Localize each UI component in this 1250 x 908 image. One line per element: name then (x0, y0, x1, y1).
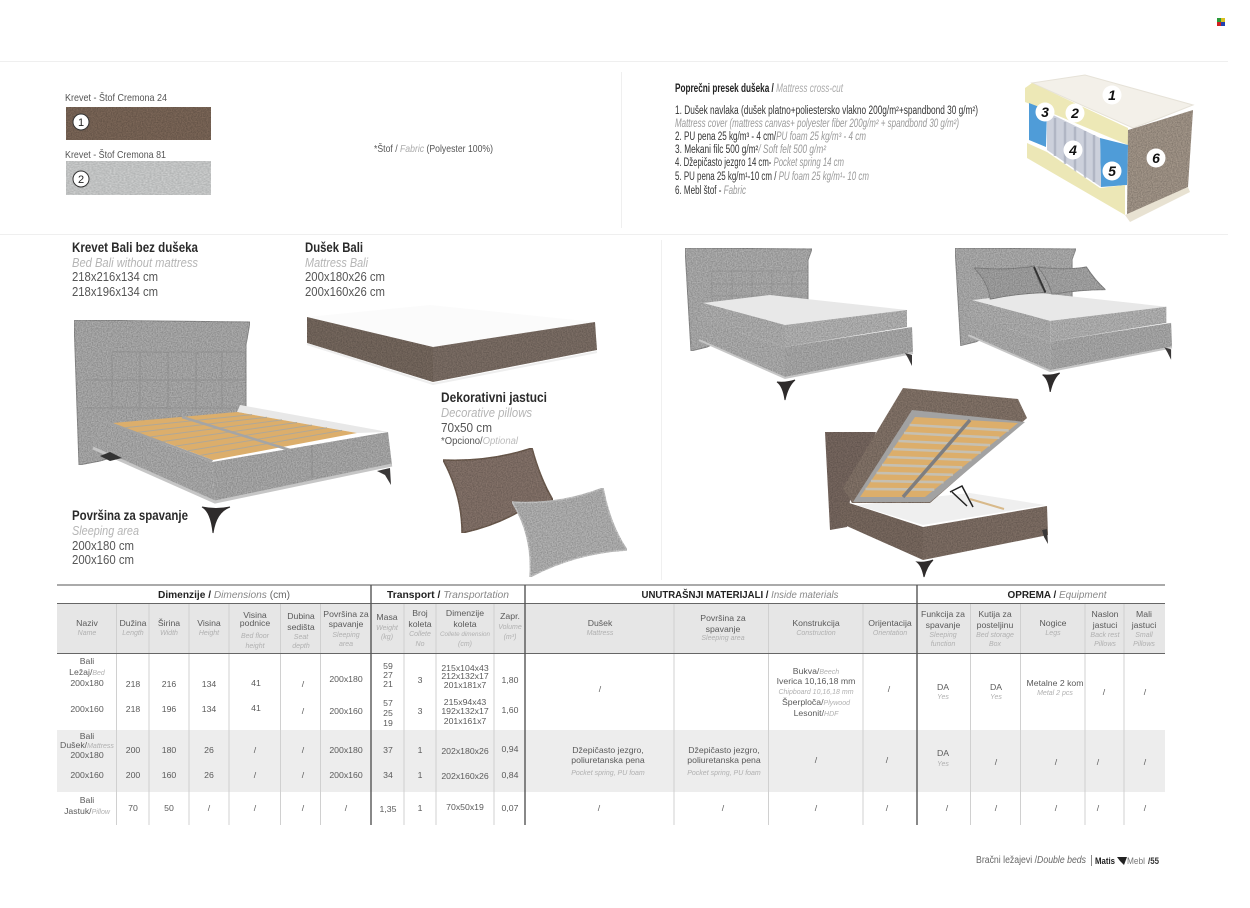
table column headers: sedišta (287, 622, 315, 632)
table row: bed 200x180 and 200x160: 41 (251, 678, 261, 688)
table column headers: Dubina (287, 611, 315, 621)
table column headers: posteljinu (977, 620, 1014, 630)
table row: pillow: / (946, 803, 949, 813)
footer: /55 (1148, 856, 1160, 867)
table row: bed 200x180 and 200x160: 1,80 (502, 675, 519, 685)
table column headers: Funkcija za (921, 609, 965, 619)
table row: bed 200x180 and 200x160: 3 (418, 675, 423, 685)
table column headers: Konstrukcija (792, 618, 840, 628)
table row: bed 200x180 and 200x160: 192x132x17 (441, 706, 489, 716)
table row: pillow: 0,07 (502, 803, 519, 813)
table row: bed 200x180 and 200x160: DA (990, 682, 1002, 692)
table column headers: Volume (498, 624, 522, 631)
table row: bed 200x180 and 200x160: 218 (126, 679, 140, 689)
table row: bed 200x180 and 200x160: 215x104x43 (441, 663, 489, 673)
table group headings (158, 588, 1108, 601)
footer: Bračni ležajevi /Double beds (976, 855, 1086, 866)
table row: bed 200x180 and 200x160: / (888, 684, 891, 694)
table row: mattress 200x180 and 200x160: Dušek/Mattress (60, 740, 114, 750)
callout numbers: 1 (1108, 87, 1116, 103)
table row: pillow (64, 795, 1147, 816)
text block: bed sizes: Krevet Bali bez dušeka (72, 240, 198, 255)
table column headers: Dimenzije (446, 608, 484, 618)
table row: bed 200x180 and 200x160: Metalne 2 kom (1027, 678, 1083, 688)
panel: mattress cross-cut text (675, 83, 978, 197)
table row: bed 200x180 and 200x160: / (1103, 687, 1106, 697)
text block: bed sizes: 218x196x134 cm (72, 284, 158, 299)
text block: sleeping area: Površina za spavanje (72, 508, 188, 523)
footer: Mebl (1127, 856, 1145, 867)
table column headers: Površina za (323, 609, 369, 619)
table group headings: OPREMA / Equipment (1008, 589, 1108, 601)
table row: pillow: / (995, 803, 998, 813)
text block: mattress sizes (305, 240, 385, 299)
table row: mattress 200x180 and 200x160: Džepičasto jezgro, (688, 745, 760, 755)
layer list (675, 105, 978, 197)
table row: mattress 200x180 and 200x160 (60, 731, 1147, 781)
table row: bed 200x180 and 200x160: 200x160 (329, 706, 363, 716)
text block: mattress sizes: Mattress Bali (305, 255, 369, 270)
table row: bed 200x180 and 200x160: Šperploča/Plywood (782, 697, 851, 707)
table column headers: Naslon (1091, 609, 1119, 619)
table column headers: Broj (412, 608, 428, 618)
text block: mattress sizes: Dušek Bali (305, 240, 363, 255)
table column headers: Sleeping area (701, 635, 745, 642)
cross-cut heading: Poprečni presek dušeka / Mattress cross-cut (675, 83, 844, 95)
table column headers: Weight (376, 625, 399, 632)
text block: sleeping area (72, 508, 188, 567)
table row: bed 200x180 and 200x160: 21 (383, 679, 393, 689)
table column headers: Height (199, 630, 220, 637)
table group headings: UNUTRAŠNJI MATERIJALI / Inside materials (642, 588, 839, 601)
table row: bed 200x180 and 200x160: 19 (383, 718, 393, 728)
table row: bed 200x180 and 200x160: 215x94x43 (444, 697, 486, 707)
table row: mattress 200x180 and 200x160: / (995, 757, 998, 767)
table row: bed 200x180 and 200x160: Iverica 10,16,18 mm (777, 676, 855, 686)
table row: bed 200x180 and 200x160: 57 (383, 698, 393, 708)
swatch 2: 2 (78, 174, 84, 186)
table group headings: Transport / Transportation (387, 589, 509, 601)
table row: mattress 200x180 and 200x160: 202x160x26 (441, 771, 489, 781)
table column headers: Kutija za (978, 609, 1012, 619)
table column headers: spavanje (706, 624, 741, 634)
table row: bed 200x180 and 200x160: 212x132x17 (441, 671, 489, 681)
table row: mattress 200x180 and 200x160: / (254, 745, 257, 755)
table row: pillow: / (254, 803, 257, 813)
table row: bed 200x180 and 200x160: DA (937, 682, 949, 692)
table column headers: Construction (796, 630, 836, 637)
table row: pillow: / (302, 803, 305, 813)
table column headers: jastuci (1131, 620, 1156, 630)
table row: bed 200x180 and 200x160: 59 (383, 661, 393, 671)
image: bed without mattress (74, 320, 392, 533)
table row: mattress 200x180 and 200x160: / (886, 755, 889, 765)
table row: pillow: / (1055, 803, 1058, 813)
footer: Matis (1095, 856, 1115, 867)
image: bed with mattress and pillows (955, 248, 1172, 392)
table column headers: Masa (376, 612, 398, 622)
image: bed with open storage (825, 388, 1048, 577)
layer list: 1. Dušek navlaka (dušek platno+poliestersko vlakno 200g/m²+spandbond 30 g/m²) (675, 105, 978, 117)
table row: bed 200x180 and 200x160: 196 (162, 704, 176, 714)
table row: mattress 200x180 and 200x160: 1 (418, 745, 423, 755)
layer list: 5. PU pena 25 kg/m¹-10 cm / PU foam 25 kg/m¹- 10 cm (675, 171, 869, 183)
table row: mattress 200x180 and 200x160: / (1144, 757, 1147, 767)
table column headers: Orijentacija (868, 618, 912, 628)
table row: pillow: / (886, 803, 889, 813)
table column headers: Orientation (873, 630, 907, 637)
table row: bed 200x180 and 200x160: / (302, 679, 305, 689)
table row: bed 200x180 and 200x160: Bukva/Beech (793, 666, 839, 676)
table column headers: function (931, 641, 955, 648)
table column headers: Small (1135, 632, 1153, 639)
icon: logo mark (1117, 857, 1127, 865)
table row: bed 200x180 and 200x160: 200x180 (329, 674, 363, 684)
text block: sleeping area: Sleeping area (72, 523, 139, 538)
image: pillows (443, 448, 627, 577)
table row: pillow: 70 (128, 803, 138, 813)
table row: pillow: / (1144, 803, 1147, 813)
table row: mattress 200x180 and 200x160: 26 (204, 745, 214, 755)
callout numbers: 6 (1152, 150, 1160, 166)
table column headers: Dušek (588, 618, 613, 628)
table row: mattress 200x180 and 200x160: 200 (126, 770, 140, 780)
table row: bed 200x180 and 200x160: 1,60 (502, 705, 519, 715)
table column headers: koleta (453, 619, 477, 629)
table column headers: jastuci (1092, 620, 1117, 630)
table column headers: spavanje (926, 620, 961, 630)
text block: sleeping area: 200x160 cm (72, 552, 134, 567)
table row: mattress 200x180 and 200x160: Bali (80, 731, 94, 741)
table group headings: Dimenzije / Dimensions (cm) (158, 589, 290, 601)
table column headers: Mattress (587, 630, 614, 637)
text block: decorative pillows (441, 390, 547, 447)
table column headers (76, 608, 1156, 650)
table row: mattress 200x180 and 200x160: poliuretanska pena (571, 755, 645, 765)
table column headers: Sleeping (929, 632, 957, 639)
table row: mattress 200x180 and 200x160: poliuretanska pena (687, 755, 761, 765)
table row: bed 200x180 and 200x160: / (1144, 687, 1147, 697)
image: bed with mattress (685, 248, 913, 400)
table row: mattress 200x180 and 200x160: 0,94 (502, 744, 519, 754)
text block: sleeping area: 200x180 cm (72, 538, 134, 553)
text block: decorative pillows: *Opciono/Optional (441, 436, 519, 447)
table row: mattress 200x180 and 200x160: 37 (383, 745, 393, 755)
callout numbers: 3 (1041, 104, 1049, 120)
table column headers: Visina (197, 618, 221, 628)
table row: mattress 200x180 and 200x160: 26 (204, 770, 214, 780)
table row: mattress 200x180 and 200x160: Pocket spring, PU foam (687, 770, 761, 777)
diagram: mattress cross-section (1025, 75, 1193, 222)
layer list: 6. Mebl štof - Fabric (675, 185, 746, 197)
swatch 2 label: Krevet - Štof Cremona 81 (65, 148, 166, 161)
table: specifications (57, 585, 1165, 825)
table column headers: Collete (409, 631, 431, 638)
table row: mattress 200x180 and 200x160: 160 (162, 770, 176, 780)
callout numbers: 2 (1070, 105, 1079, 121)
table column headers: Zapr. (500, 611, 520, 621)
table column headers: spavanje (329, 619, 364, 629)
callout numbers (1036, 86, 1166, 180)
table row: mattress 200x180 and 200x160: / (302, 770, 305, 780)
table column headers: height (245, 643, 266, 650)
swatch 1 label: Krevet - Štof Cremona 24 (65, 91, 167, 104)
table row: pillow: / (1097, 803, 1100, 813)
table row: mattress 200x180 and 200x160: / (1097, 757, 1100, 767)
swatch 2 (66, 161, 211, 195)
text block: bed sizes: Bed Bali without mattress (72, 255, 198, 270)
table row: bed 200x180 and 200x160: / (599, 684, 602, 694)
text block: decorative pillows: Decorative pillows (441, 405, 532, 420)
swatch 1: 1 (78, 117, 84, 129)
table row: pillow: 70x50x19 (446, 802, 484, 812)
table column headers: Bed floor (241, 633, 270, 640)
table column headers: Name (78, 630, 96, 637)
table row: mattress 200x180 and 200x160: / (1055, 757, 1058, 767)
table row: pillow: / (345, 803, 348, 813)
table column headers: area (339, 641, 353, 648)
table row: pillow: Bali (80, 795, 94, 805)
table row: mattress 200x180 and 200x160: / (302, 745, 305, 755)
swatch 1 (66, 107, 211, 140)
table row: bed 200x180 and 200x160: 41 (251, 703, 261, 713)
table row: bed 200x180 and 200x160: 25 (383, 708, 393, 718)
table column headers: Nogice (1039, 618, 1067, 628)
table column headers: Visina (243, 610, 267, 620)
table row: bed 200x180 and 200x160: 201x181x7 (444, 680, 486, 690)
table column headers: depth (292, 643, 310, 650)
layer list: 3. Mekani filc 500 g/m²/ Soft felt 500 g/m² (675, 144, 827, 156)
table row: bed 200x180 and 200x160: / (302, 706, 305, 716)
table column headers: Pillows (1133, 641, 1155, 648)
table column headers: Seat (294, 634, 309, 641)
table row: bed 200x180 and 200x160: Ležaj/Bed (69, 667, 106, 677)
table column headers: koleta (408, 619, 432, 629)
table row: mattress 200x180 and 200x160: 200x180 (329, 745, 363, 755)
footer (976, 855, 1160, 867)
table column headers: (kg) (381, 634, 393, 641)
table column headers: Collete dimension (440, 631, 491, 638)
text block: bed sizes (72, 240, 198, 299)
table row: mattress 200x180 and 200x160: Yes (937, 761, 949, 768)
table row: bed 200x180 and 200x160: 134 (202, 679, 216, 689)
table row: pillow: Jastuk/Pillow (64, 806, 111, 816)
table row: mattress 200x180 and 200x160: Džepičasto jezgro, (572, 745, 644, 755)
table column headers: Back rest (1090, 632, 1121, 639)
fabric note: *Štof / Fabric (Polyester 100%) (374, 142, 493, 155)
table row: mattress 200x180 and 200x160: Pocket spring, PU foam (571, 770, 645, 777)
table row: bed 200x180 and 200x160: Metal 2 pcs (1037, 690, 1073, 697)
layer list: Mattress cover (mattress canvas+ polyester fiber 200g/m² + spandbond 30 g/m²) (675, 118, 959, 130)
table column headers: Width (160, 630, 178, 637)
table row: mattress 200x180 and 200x160: 200x160 (70, 770, 104, 780)
table row: bed 200x180 and 200x160: 218 (126, 704, 140, 714)
table column headers: Naziv (76, 618, 99, 628)
table row: mattress 200x180 and 200x160: 1 (418, 770, 423, 780)
layer list: 2. PU pena 25 kg/m³ - 4 cm/PU foam 25 kg/m³ - 4 cm (675, 131, 866, 143)
table row: mattress 200x180 and 200x160: 200 (126, 745, 140, 755)
callout numbers: 4 (1068, 142, 1077, 158)
text block: mattress sizes: 200x160x26 cm (305, 284, 385, 299)
table row: mattress 200x180 and 200x160: 200x180 (70, 750, 104, 760)
icon: colour marker (1217, 18, 1225, 26)
table row: bed 200x180 and 200x160: Yes (990, 694, 1002, 701)
callout numbers: 5 (1108, 163, 1116, 179)
table row: mattress 200x180 and 200x160: 200x160 (329, 770, 363, 780)
table row: bed 200x180 and 200x160: Chipboard 10,16,18 mm (778, 689, 854, 696)
table row: bed 200x180 and 200x160: 3 (418, 706, 423, 716)
image: mattress (307, 305, 597, 384)
table column headers: No (416, 641, 425, 648)
table column headers: Mali (1136, 609, 1152, 619)
table column headers: Površina za (700, 613, 746, 623)
text block: decorative pillows: Dekorativni jastuci (441, 390, 547, 405)
table row: pillow: / (598, 803, 601, 813)
table column headers: Bed storage (976, 632, 1014, 639)
table column headers: podnice (240, 618, 270, 628)
table column headers: (m³) (504, 634, 516, 641)
table column headers: Dužina (119, 618, 147, 628)
table column headers: Box (989, 641, 1002, 648)
table column headers: Length (122, 630, 144, 637)
layer list: 4. Džepičasto jezgro 14 cm- Pocket spring 14 cm (675, 157, 844, 169)
table row: mattress 200x180 and 200x160: 180 (162, 745, 176, 755)
table row: bed 200x180 and 200x160: Yes (937, 694, 949, 701)
table row: pillow: / (722, 803, 725, 813)
table row: mattress 200x180 and 200x160: 202x180x26 (441, 746, 489, 756)
table row: pillow: 1,35 (380, 804, 397, 814)
table column headers: Širina (158, 618, 180, 628)
table row: bed 200x180 and 200x160: 134 (202, 704, 216, 714)
table row: bed 200x180 and 200x160: 201x161x7 (444, 716, 486, 726)
table row: mattress 200x180 and 200x160: 34 (383, 770, 393, 780)
table row: pillow: / (815, 803, 818, 813)
text block: mattress sizes: 200x180x26 cm (305, 269, 385, 284)
table column headers: Pillows (1094, 641, 1116, 648)
table row: mattress 200x180 and 200x160: / (815, 755, 818, 765)
table row: bed 200x180 and 200x160: 200x180 (70, 678, 104, 688)
table column headers: Sleeping (332, 632, 360, 639)
table row: mattress 200x180 and 200x160: / (254, 770, 257, 780)
panel: fabric swatches (65, 91, 211, 195)
table row: bed 200x180 and 200x160: 27 (383, 670, 393, 680)
table row: bed 200x180 and 200x160: Lesonit/HDF (794, 708, 839, 718)
table row: mattress 200x180 and 200x160: DA (937, 748, 949, 758)
text block: bed sizes: 218x216x134 cm (72, 269, 158, 284)
text block: decorative pillows: 70x50 cm (441, 420, 492, 435)
table row: bed 200x180 and 200x160: 200x160 (70, 704, 104, 714)
table column headers: (cm) (458, 641, 472, 648)
table row: pillow: 1 (418, 803, 423, 813)
table row: bed 200x180 and 200x160: 216 (162, 679, 176, 689)
table row: mattress 200x180 and 200x160: 0,84 (502, 770, 519, 780)
table row: pillow: / (208, 803, 211, 813)
table row: bed 200x180 and 200x160: Bali (80, 656, 94, 666)
table row: pillow: 50 (164, 803, 174, 813)
table row: bed 200x180 and 200x160 (69, 656, 1147, 728)
table column headers: Legs (1045, 630, 1061, 637)
